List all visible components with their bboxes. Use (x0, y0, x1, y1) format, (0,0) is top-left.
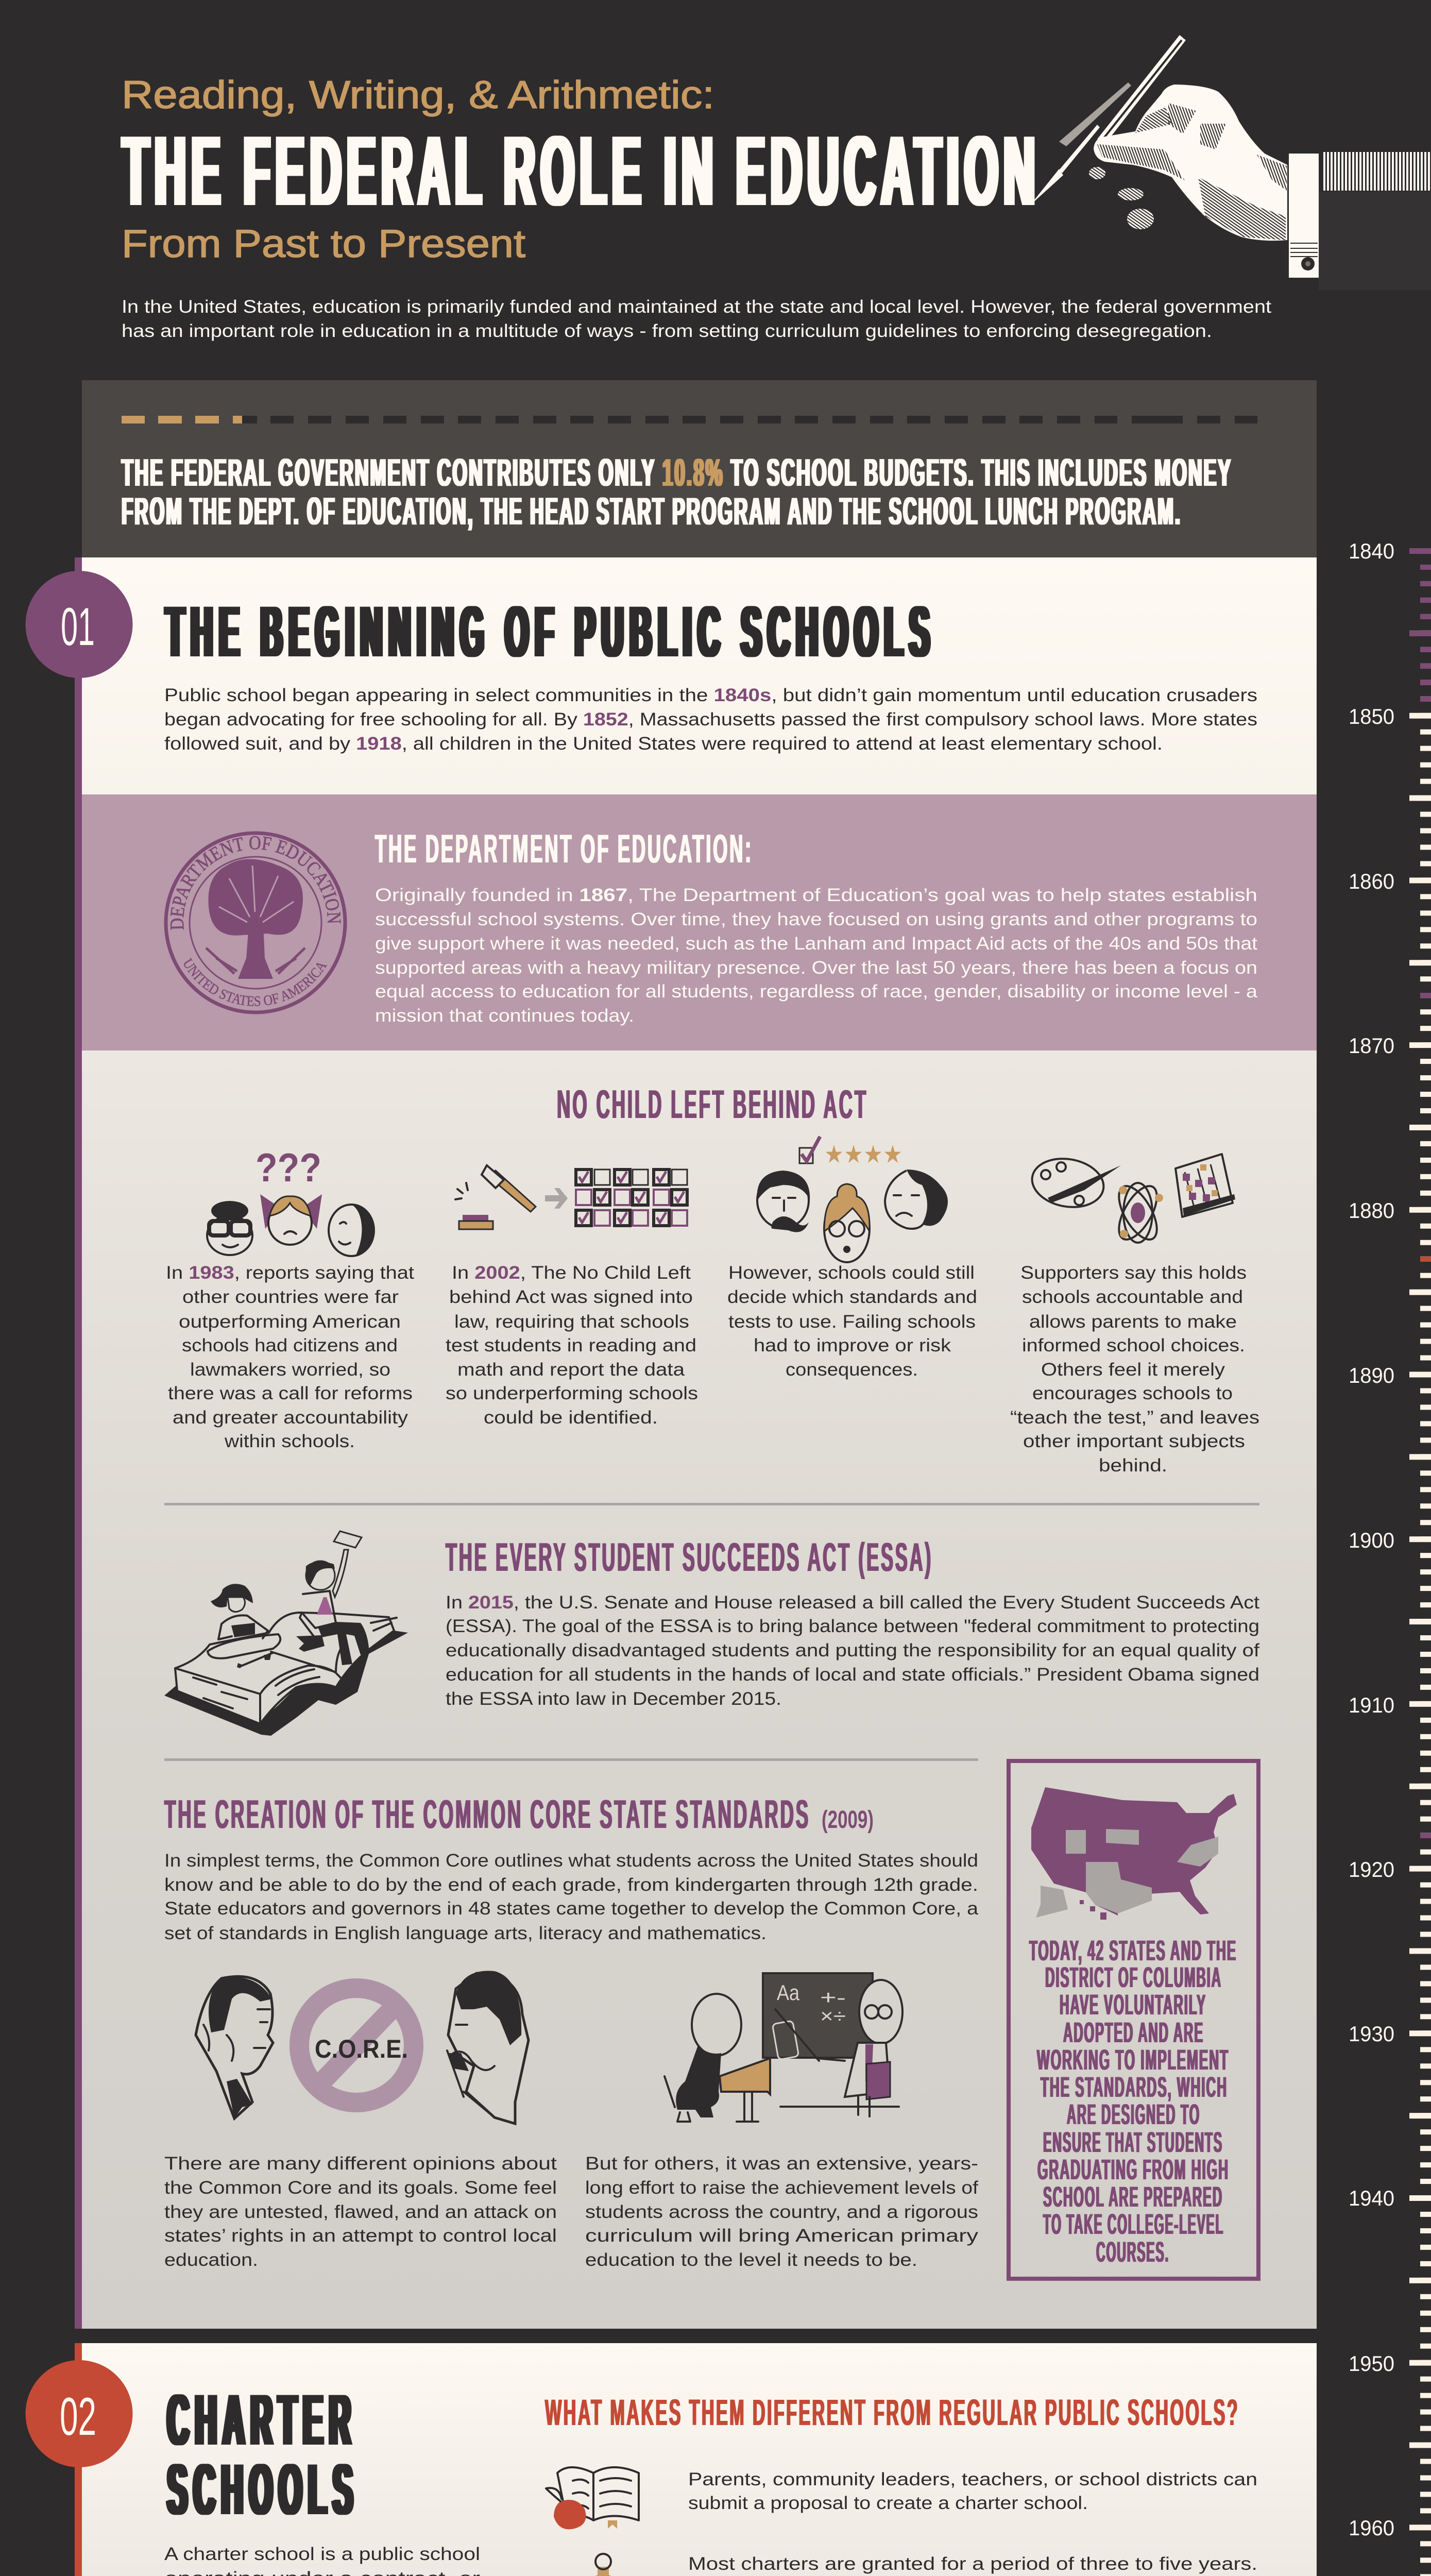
text: 2002 act: behind Act was signed into (449, 1287, 693, 1307)
department of education text (375, 885, 1258, 1026)
text: standards choice: decide which standards and (727, 1287, 977, 1307)
callout text (1029, 1934, 1237, 2268)
text: common core summary: set of standards in English language arts, literacy and mathematics. (164, 1923, 766, 1943)
book shadow (164, 1631, 408, 1736)
icon: puzzled children (207, 1145, 374, 1256)
column: 2002 act (446, 1165, 698, 1428)
text: every student succeeds act: education for all students in the hands of local and state officials.” President Obama signed (446, 1665, 1259, 1685)
timeline year labels (1345, 539, 1394, 2576)
timeline highlighted years (1409, 548, 1431, 2576)
text: supporters and critics: schools accountable and (1022, 1287, 1243, 1307)
callout: state adoption map (1009, 1761, 1258, 2279)
illustration: teacher and student at chalkboard: ×÷ (820, 2006, 846, 2027)
department of education text: mission that continues today. (375, 1006, 634, 1026)
heading: common core state standards: (2009) (822, 1806, 874, 1834)
timeline year labels: 1900 (1349, 1528, 1394, 1552)
text: Parents, community leaders, teachers, or school districts can (688, 2469, 1257, 2489)
icon: palette, atom and abacus (1028, 1154, 1235, 1245)
text: common core supporters: students across the country, and a rigorous (585, 2202, 978, 2222)
panel: section 02 charter schools: SCHOOLS (167, 2449, 359, 2530)
text: supporters and critics: other important subjects (1023, 1431, 1245, 1451)
text: every student succeeds act: the ESSA into law in December 2015. (446, 1689, 781, 1709)
text: 1983 reports: outperforming American (179, 1312, 401, 1332)
text (688, 2469, 1257, 2513)
text: 1983 reports: other countries were far (182, 1287, 399, 1307)
text: common core supporters: education to the level it needs to be. (585, 2250, 917, 2270)
panel: federal budget callout (82, 380, 1317, 557)
timeline year labels: 1840 (1349, 539, 1394, 563)
panel: the department of education: THE DEPARTMENT OF EDUCATION: (375, 826, 753, 871)
girl reading (211, 1584, 253, 1607)
icon: book and apple (546, 2467, 639, 2529)
text: common core summary: State educators and governors in 48 states came together to develop the Common Core, a (164, 1899, 979, 1919)
panel: section 01 the beginning of public schools: NO CHILD LEFT BEHIND ACT (557, 1081, 868, 1127)
text: common core summary: In simplest terms, the Common Core outlines what students across the United States should (164, 1851, 978, 1871)
icon: angry man right (447, 1971, 529, 2124)
text: common core supporters: But for others, it was an extensive, years- (585, 2154, 978, 2174)
text: common core opinions: the Common Core and its goals. Some feel (164, 2178, 557, 2198)
section heading (167, 2379, 359, 2530)
illustration: teacher and student at chalkboard: Aa (777, 1980, 800, 2005)
intro paragraph (122, 297, 1271, 341)
callout text: COURSES. (1096, 2235, 1169, 2268)
text: 1983 reports: within schools. (224, 1431, 355, 1451)
text: common core opinions: they are untested, flawed, and an attack on (164, 2202, 557, 2222)
text: supporters and critics: informed school choices. (1022, 1335, 1245, 1355)
callout text: THE STANDARDS, WHICH (1041, 2071, 1228, 2103)
text: supporters and critics: behind. (1099, 1455, 1167, 1476)
text: 2002 act: In 2002 , The No Child Left (452, 1263, 691, 1283)
title: kicker: Reading, Writing, & Arithmetic: (122, 73, 714, 117)
text: every student succeeds act: educationally disadvantaged students and putting the responsibility for an equal quality of (446, 1640, 1259, 1660)
text: 2002 act: law, requiring that schools (454, 1312, 689, 1332)
heading: common core state standards (164, 1791, 874, 1837)
text: 1983 reports: In 1983 , reports saying that (166, 1263, 414, 1283)
text: charter school definition (164, 2544, 480, 2576)
callout: state adoption map: DISTRICT OF COLUMBIA (1045, 1961, 1222, 1993)
icon: teachers with rating stars (757, 1137, 948, 1262)
text: common core opinions: education. (164, 2250, 258, 2270)
timeline year labels: 1950 (1349, 2351, 1394, 2376)
section intro text (164, 685, 1257, 754)
timeline year labels: 1920 (1349, 1857, 1394, 1882)
icon: stopwatch (580, 2554, 627, 2576)
panel: section 02 charter schools: CHARTER (167, 2379, 357, 2460)
icon: department of education seal: DEPARTMENT OF EDUCATION (170, 836, 341, 930)
timeline (1345, 539, 1431, 2576)
text: supporters and critics: encourages schools to (1032, 1383, 1233, 1403)
text: every student succeeds act: (ESSA). The goal of the ESSA is to bring balance between "federal commitment to protecting (446, 1616, 1259, 1636)
text: standards choice: had to improve or risk (754, 1335, 951, 1355)
department of education text: supported areas with a heavy military presence. Over the last 50 years, there has been a focus on (375, 958, 1257, 978)
text: standards choice: tests to use. Failing schools (728, 1312, 976, 1332)
timeline year labels: 1930 (1349, 2022, 1394, 2046)
icon: angry man left (196, 1976, 273, 2119)
intro paragraph: In the United States, education is primarily funded and maintained at the state and local level. However, the federal government (122, 297, 1271, 317)
text: supporters and critics (1010, 1263, 1259, 1476)
department of education text: give support where it was needed, such as the Lanham and Impact Aid acts of the 40s and 50s that (375, 934, 1257, 954)
section number badge 01: 01 (61, 597, 95, 657)
timeline year labels: 1940 (1349, 2186, 1394, 2210)
text: 1983 reports (166, 1263, 414, 1451)
text: common core opinions: states’ rights in an attempt to control local (164, 2226, 557, 2246)
text: 2002 act (446, 1263, 698, 1428)
timeline year labels: 1880 (1349, 1198, 1394, 1223)
text: 2002 act: could be identified. (484, 1408, 658, 1428)
callout text: ARE DESIGNED TO (1067, 2098, 1200, 2130)
text: common core opinions: There are many different opinions about (164, 2154, 557, 2174)
icon: gavel and checkbox tests (455, 1165, 687, 1229)
title: subheading: From Past to Present (122, 222, 525, 266)
text: common core supporters: curriculum will bring American primary (585, 2226, 979, 2246)
illustration: children on open book (164, 1531, 408, 1736)
icon: no core prohibition sign: C.O.R.E. (315, 2035, 408, 2063)
timeline year labels: 1850 (1349, 704, 1394, 728)
text: charter school definition: A charter school is a public school (164, 2544, 480, 2564)
chart: 10.8 percent dash bar (122, 416, 1257, 423)
text: every student succeeds act: In 2015 , the U.S. Senate and House released a bill called the Every Student Succeeds Act (446, 1592, 1259, 1613)
text: common core summary: know and be able to do by the end of each grade, from kindergarten through 12th grade. (164, 1875, 978, 1895)
panel: section 01 the beginning of public schools (26, 557, 1317, 2329)
callout text: ADOPTED AND ARE (1063, 2016, 1204, 2048)
timeline year labels: 1860 (1349, 869, 1394, 893)
text: common core supporters: long effort to raise the achievement levels of (585, 2178, 978, 2198)
text: 1983 reports: there was a call for reforms (168, 1383, 413, 1403)
timeline year labels: 1890 (1349, 1363, 1394, 1387)
department of education text: Originally founded in 1867 , The Department of Education’s goal was to help states establish (375, 885, 1257, 905)
text: supporters and critics: Supporters say this holds (1020, 1263, 1247, 1283)
illustration: teacher and student at chalkboard: +- (820, 1987, 846, 2009)
text: 2002 act: test students in reading and (446, 1335, 696, 1355)
map: united states adoption (1031, 1787, 1237, 1920)
callout: state adoption map: SCHOOL ARE PREPARED (1043, 2180, 1223, 2213)
text: standards choice: However, schools could still (728, 1263, 975, 1283)
illustration: teacher and student at chalkboard (665, 1973, 902, 2122)
icon: puzzled children: ??? (255, 1145, 321, 1190)
column: 1983 reports (166, 1145, 414, 1451)
icon: department of education seal: UNITED STATES OF AMERICA (184, 957, 328, 1006)
callout text (122, 451, 1232, 533)
timeline year labels: 1960 (1349, 2516, 1394, 2540)
column: standards choice (727, 1137, 977, 1380)
callout text: HAVE VOLUNTARILY (1060, 1988, 1206, 2021)
title block (122, 73, 1041, 266)
text: submit a proposal to create a charter school. (688, 2493, 1088, 2513)
item: charter duration (580, 2554, 1257, 2576)
section number badge 01 (26, 571, 133, 678)
section number badge 02 (26, 2360, 133, 2467)
illustration: opponents and no core sign (196, 1971, 529, 2124)
item: who can submit a proposal (546, 2467, 1257, 2529)
text: standards choice (727, 1263, 977, 1380)
column: supporters and critics (1010, 1154, 1259, 1476)
icon: department of education seal (164, 832, 347, 1014)
department of education text: equal access to education for all students, regardless of race, gender, disability or income level - a (375, 981, 1258, 1002)
text: supporters and critics: allows parents to make (1029, 1312, 1237, 1332)
text: supporters and critics: Others feel it merely (1041, 1360, 1225, 1380)
book pages (175, 1613, 394, 1724)
text: supporters and critics: “teach the test,” and leaves (1010, 1408, 1259, 1428)
panel: the department of education (82, 794, 1317, 1050)
section intro text: began advocating for free schooling for all. By 1852 , Massachusetts passed the first compulsory school laws. More states (164, 709, 1257, 730)
text: Most charters are granted for a period of three to five years. (688, 2554, 1257, 2574)
text: standards choice: consequences. (786, 1360, 918, 1380)
text: 1983 reports: and greater accountability (173, 1408, 408, 1428)
icon: no core prohibition sign (299, 1988, 414, 2103)
text: 2002 act: math and report the data (457, 1360, 685, 1380)
text: 1983 reports: schools had citizens and (182, 1335, 398, 1355)
text: 1983 reports: lawmakers worried, so (190, 1360, 390, 1380)
boy with raised book (306, 1561, 335, 1590)
text: common core summary (164, 1851, 979, 1943)
department of education text: successful school systems. Over time, they have focused on using grants and other programs to (375, 909, 1257, 929)
section number badge 02: 02 (60, 2387, 96, 2447)
section intro text: followed suit, and by 1918 , all children in the United States were required to attend at least elementary school. (164, 734, 1163, 754)
icon: teachers with rating stars: ★★★★ (824, 1140, 902, 1169)
timeline year labels: 1910 (1349, 1693, 1394, 1717)
intro paragraph: has an important role in education in a multitude of ways - from setting curriculum guidelines to enforcing desegregation. (122, 321, 1212, 341)
timeline year labels: 1870 (1349, 1033, 1394, 1058)
panel: section 02 charter schools (26, 2343, 1317, 2576)
text: common core opinions (164, 2154, 557, 2270)
text: 2002 act: so underperforming schools (446, 1383, 698, 1403)
text: every student succeeds act (446, 1592, 1259, 1709)
text: common core supporters (585, 2154, 979, 2270)
section intro text: Public school began appearing in select communities in the 1840s , but didn’t gain momentum until education crusaders (164, 685, 1257, 705)
icon: engraved hand holding a pen (1030, 35, 1431, 290)
